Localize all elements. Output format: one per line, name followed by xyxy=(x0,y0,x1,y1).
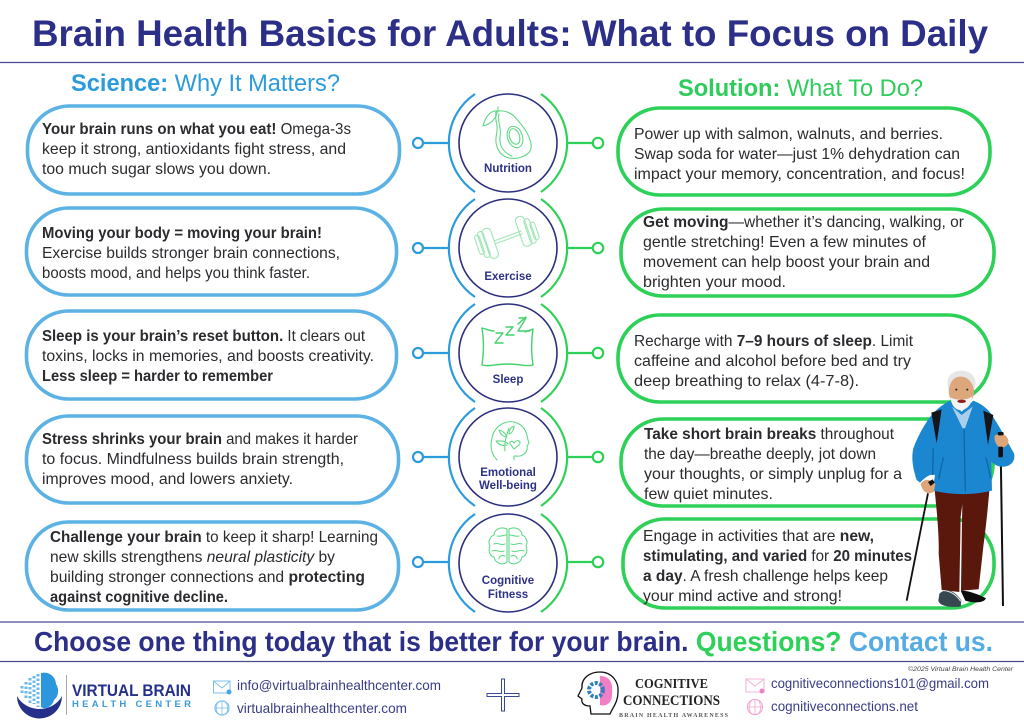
right pole xyxy=(1001,447,1003,606)
label: exercise: Exercise xyxy=(484,271,532,283)
panel: science nutrition xyxy=(28,106,400,194)
call to action: Choose one thing today that is better for your brain. Questions? Contact us. xyxy=(34,626,993,657)
panel: solution nutrition: Swap soda for water—just 1% dehydration can xyxy=(634,146,960,163)
panel: solution stress: the day—breathe deeply, jot down xyxy=(644,446,876,463)
panel: science nutrition: keep it strong, antioxidants fight stress, and xyxy=(42,141,346,158)
panel: science nutrition: too much sugar slows you down. xyxy=(42,161,271,178)
panel: science exercise: boosts mood, and helps you think faster. xyxy=(42,265,310,282)
panel: science cognition: new skills strengthens neural plasticity by xyxy=(50,549,335,566)
icon: head with leaves and heart xyxy=(491,422,529,460)
panel: solution exercise: movement can help boost your brain and xyxy=(643,254,930,271)
icon: dumbbell xyxy=(474,215,540,259)
wordmark: connections: CONNECTIONS xyxy=(623,693,720,709)
panel: solution sleep xyxy=(618,315,990,402)
panel: solution cognition xyxy=(623,519,994,608)
label: emotional: Emotional xyxy=(480,467,536,479)
heading: solution: Solution: What To Do? xyxy=(678,75,923,102)
jacket xyxy=(912,401,1014,494)
panel: science cognition: Challenge your brain to keep it sharp! Learning xyxy=(50,529,378,546)
right shoe xyxy=(961,591,986,602)
label: nutrition: Nutrition xyxy=(484,163,532,175)
panel: science exercise: Exercise builds stronger brain connections, xyxy=(42,245,340,262)
label: fitness: Fitness xyxy=(488,589,528,601)
label: well-being: Well-being xyxy=(479,480,537,492)
label: sleep: Sleep xyxy=(493,374,523,386)
panel: science sleep: Sleep is your brain’s reset button. It clears out xyxy=(42,328,366,345)
panel: science cognition: building stronger connections and protecting xyxy=(50,569,365,586)
panel: solution sleep: Recharge with 7–9 hours of sleep. Limit xyxy=(634,333,914,350)
icon: plus xyxy=(487,679,519,711)
hub: nutrition xyxy=(413,94,603,192)
panel: science stress: Stress shrinks your brain and makes it harder xyxy=(42,431,358,448)
panel: solution exercise: brighten your mood. xyxy=(643,274,786,291)
panel: science sleep: Less sleep = harder to remember xyxy=(42,368,273,385)
panel: science exercise: Moving your body = moving your brain! xyxy=(42,225,322,242)
contact: virtual brain website: virtualbrainhealthcenter.com xyxy=(237,700,407,716)
wordmark: cognitive: COGNITIVE xyxy=(635,677,708,692)
logo: virtual brain health center xyxy=(17,673,191,718)
panel: solution stress: your thoughts, or simply unplug for a xyxy=(644,466,902,483)
panel: solution exercise: Get moving—whether it’s dancing, walking, or xyxy=(643,214,964,231)
panel: science sleep xyxy=(26,311,396,399)
panel: science stress xyxy=(26,416,398,503)
panel: solution exercise xyxy=(621,209,994,296)
straps xyxy=(931,409,993,445)
illustration: senior man with trekking poles xyxy=(907,371,1014,607)
panel: solution sleep: deep breathing to relax (4-7-8). xyxy=(634,373,859,390)
hub: emotional well-being xyxy=(413,408,603,506)
tagline: BRAIN HEALTH AWARENESS xyxy=(619,713,729,719)
icon: brain xyxy=(489,528,527,564)
icon: avocado xyxy=(483,107,531,158)
left leg xyxy=(935,490,964,592)
label: cognitive: Cognitive xyxy=(482,575,534,587)
brain mark xyxy=(17,673,62,718)
panel: solution sleep: caffeine and alcohol before bed and try xyxy=(634,353,911,370)
panel: solution cognition: your mind active and strong! xyxy=(643,588,842,605)
title: Brain Health Basics for Adults: What to Focus on Daily xyxy=(32,13,988,54)
hands xyxy=(921,434,1008,493)
heading: science: Science: Why It Matters? xyxy=(71,70,340,97)
panel: solution nutrition: Power up with salmon, walnuts, and berries. xyxy=(634,126,943,143)
panel: solution cognition: stimulating, and varied for 20 minutes xyxy=(643,548,912,565)
panel: solution exercise: gentle stretching! Even a few minutes of xyxy=(643,234,927,251)
panel: solution cognition: Engage in activities that are new, xyxy=(643,528,874,545)
grips xyxy=(928,479,935,486)
panel: solution stress: few quiet minutes. xyxy=(644,486,773,503)
left shoe xyxy=(938,590,961,607)
panel: science cognition: against cognitive decline. xyxy=(50,589,228,606)
hub: cognitive fitness xyxy=(413,514,603,612)
hub: exercise xyxy=(413,199,603,297)
panel: science exercise xyxy=(26,208,396,295)
hub: sleep xyxy=(413,304,603,402)
left pole xyxy=(907,493,928,601)
panel: solution nutrition xyxy=(618,108,990,195)
panel: solution stress: Take short brain breaks throughout xyxy=(644,426,895,443)
panel: science stress: to focus. Mindfulness builds brain strength, xyxy=(42,451,344,468)
shirt xyxy=(952,407,973,428)
logo: cognitive connections xyxy=(578,672,729,719)
panel: solution nutrition: impact your memory, concentration, and focus! xyxy=(634,166,965,183)
panel: science cognition xyxy=(26,522,398,610)
contact: virtual brain email: info@virtualbrainhealthcenter.com xyxy=(237,677,441,693)
wordmark: VIRTUAL BRAIN xyxy=(72,682,191,700)
icon: pillow with zzz xyxy=(482,317,533,366)
panel: solution cognition: a day. A fresh challenge helps keep xyxy=(643,568,888,585)
tagline: HEALTH CENTER xyxy=(72,699,191,710)
panel: solution stress xyxy=(621,419,993,506)
panel: science stress: improves mood, and lowers anxiety. xyxy=(42,471,293,488)
panel: science sleep: toxins, locks in memories, and boosts creativity. xyxy=(42,348,374,365)
panel: science nutrition: Your brain runs on what you eat! Omega-3s xyxy=(42,121,351,138)
right leg xyxy=(961,491,989,591)
copyright: ©2025 Virtual Brain Health Center xyxy=(908,665,1014,673)
head mark xyxy=(578,672,618,714)
contact: cognitive connections email: cognitiveconnections101@gmail.com xyxy=(771,675,989,691)
head xyxy=(949,375,974,407)
contact: cognitive connections website: cognitiveconnections.net xyxy=(771,698,918,714)
